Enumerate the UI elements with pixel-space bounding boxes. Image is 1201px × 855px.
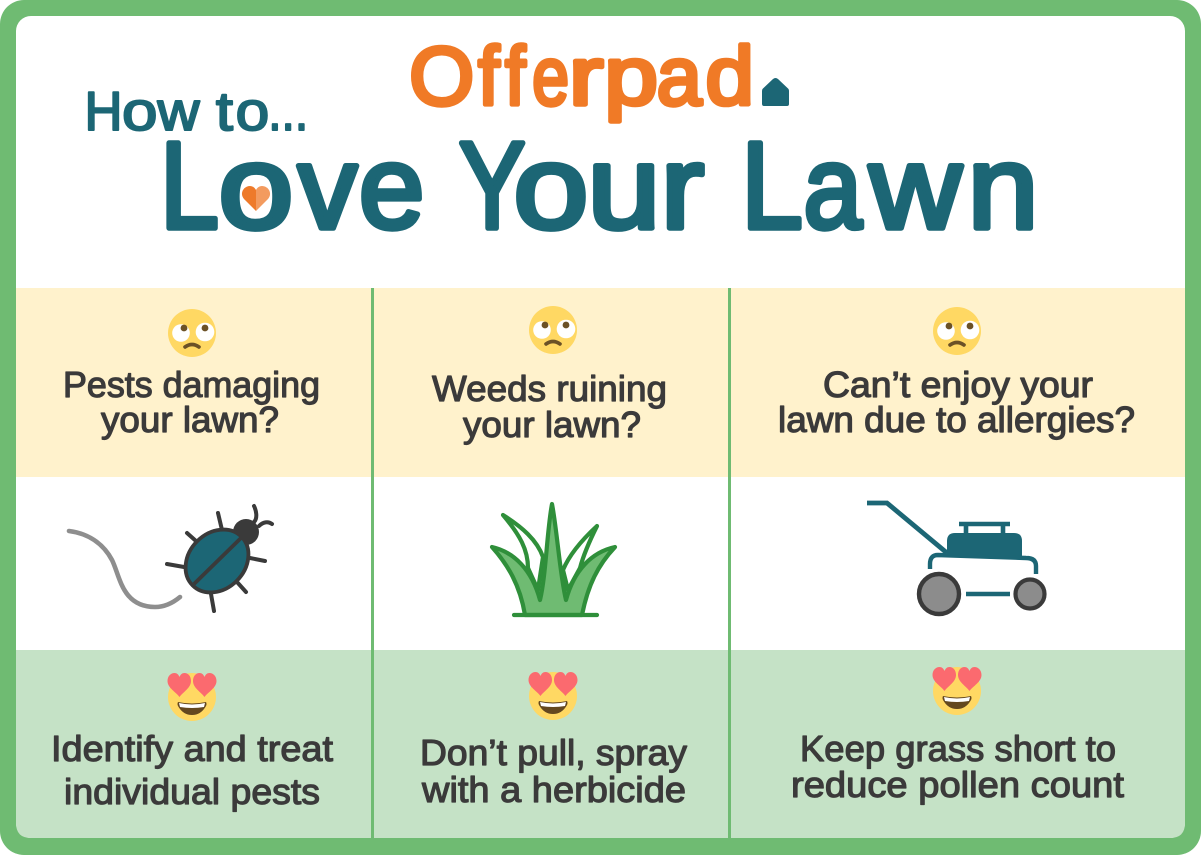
heading: How to: w xyxy=(156,81,200,142)
title: Love Your Lawn: o xyxy=(514,122,588,254)
title: Love Your Lawn: w xyxy=(868,122,962,254)
emoji: eye roll 1 xyxy=(168,309,216,357)
icon: house xyxy=(762,78,789,106)
solution text 2 xyxy=(420,732,687,810)
problem text 1 xyxy=(63,364,320,440)
problem text 2 xyxy=(432,368,667,445)
title: Love Your Lawn: v xyxy=(298,122,357,254)
icon: lawn mower xyxy=(867,503,1044,614)
logo: Offerpad: e xyxy=(532,29,569,122)
solution band xyxy=(16,650,1185,838)
logo: Offerpad: a xyxy=(657,29,703,122)
logo: Offerpad: f xyxy=(478,29,500,122)
heading: How to: o xyxy=(236,81,269,142)
title: Love Your Lawn: n xyxy=(968,122,1038,254)
heading: How to: H xyxy=(84,81,122,142)
column divider left xyxy=(371,288,374,838)
solution text 1: Identify and treat xyxy=(51,728,333,769)
column divider right xyxy=(728,288,731,838)
logo: Offerpad: d xyxy=(706,29,754,122)
logo: Offerpad: p xyxy=(604,29,658,122)
solution text 3: reduce pollen count xyxy=(791,764,1124,805)
emoji: eye roll 3 xyxy=(933,307,981,355)
title: Love Your Lawn: a xyxy=(804,122,862,254)
problem text 3: lawn due to allergies? xyxy=(778,399,1135,440)
solution text 2: with a herbicide xyxy=(421,769,686,810)
solution text 2: Don’t pull, spray xyxy=(420,732,687,773)
title: Love Your Lawn: L xyxy=(160,118,219,255)
icon: beetle with trail xyxy=(69,506,272,611)
solution text 1: individual pests xyxy=(64,771,320,812)
problem text 1: your lawn? xyxy=(101,399,279,440)
heading: How to: o xyxy=(122,81,158,142)
emoji: heart eyes 2 xyxy=(528,672,578,720)
problem band xyxy=(16,288,1185,477)
title: Love Your Lawn: r xyxy=(661,122,704,254)
icon: heart in the o xyxy=(242,186,270,211)
problem text 2: Weeds ruining xyxy=(432,368,667,409)
emoji: heart eyes 1 xyxy=(168,673,216,721)
solution text 3: Keep grass short to xyxy=(800,728,1116,769)
title: Love Your Lawn: L xyxy=(741,118,803,255)
emoji: eye roll 2 xyxy=(529,306,577,354)
logo: Offerpad: O xyxy=(409,29,474,122)
logo: Offerpad xyxy=(409,29,789,122)
problem text 3 xyxy=(778,364,1135,440)
title: Love Your Lawn: o xyxy=(218,122,293,254)
solution text 3 xyxy=(791,728,1124,805)
title: Love Your Lawn xyxy=(160,118,1038,255)
heading: How to: t xyxy=(216,81,233,142)
problem text 3: Can’t enjoy your xyxy=(823,364,1093,405)
emoji: heart eyes 3 xyxy=(932,667,982,715)
title: Love Your Lawn: u xyxy=(588,122,660,254)
logo: Offerpad: r xyxy=(569,29,603,122)
solution text 1 xyxy=(51,728,333,812)
icon: grass tuft xyxy=(492,504,615,615)
title: Love Your Lawn: Y xyxy=(459,118,525,255)
problem text 2: your lawn? xyxy=(463,404,641,445)
logo: Offerpad: f xyxy=(505,29,526,122)
problem text 1: Pests damaging xyxy=(63,364,320,405)
title: Love Your Lawn: e xyxy=(359,122,424,254)
heading: How to: ... xyxy=(268,81,308,142)
